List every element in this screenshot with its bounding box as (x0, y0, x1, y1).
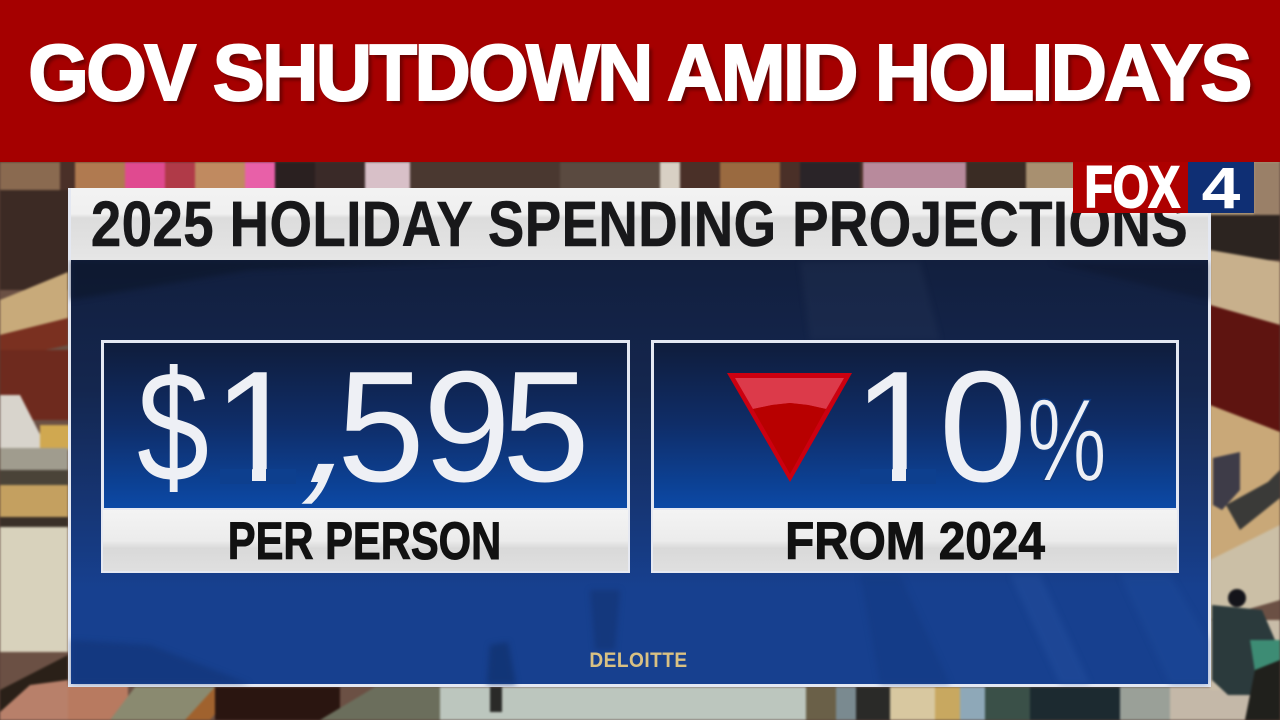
graphic panel (68, 188, 1211, 687)
amount: 1 (213, 340, 301, 515)
logo number part (1188, 162, 1254, 213)
label: FROM 2024 (785, 512, 1045, 571)
ghost mall overlay (68, 260, 1211, 687)
right column (1210, 160, 1280, 215)
card: per person (101, 340, 630, 573)
percent (853, 340, 1107, 508)
amount: $ (137, 340, 209, 515)
headline: GOV SHUTDOWN AMID HOLIDAYS (28, 28, 1250, 117)
amount: 595 (337, 340, 590, 515)
percent: % (1027, 375, 1107, 507)
label: PER PERSON (228, 512, 501, 571)
top banner (0, 0, 1280, 162)
left column (0, 190, 70, 290)
card: change from 2024 (651, 340, 1179, 573)
label (651, 508, 1179, 573)
source: DELOITTE (589, 649, 688, 672)
icon: red down triangle (727, 373, 852, 482)
panel title: 2025 HOLIDAY SPENDING PROJECTIONS (91, 188, 1188, 260)
amount (137, 340, 590, 519)
bottom strip (68, 685, 128, 720)
logo: FOX 4 (1073, 162, 1254, 213)
label (101, 508, 630, 573)
